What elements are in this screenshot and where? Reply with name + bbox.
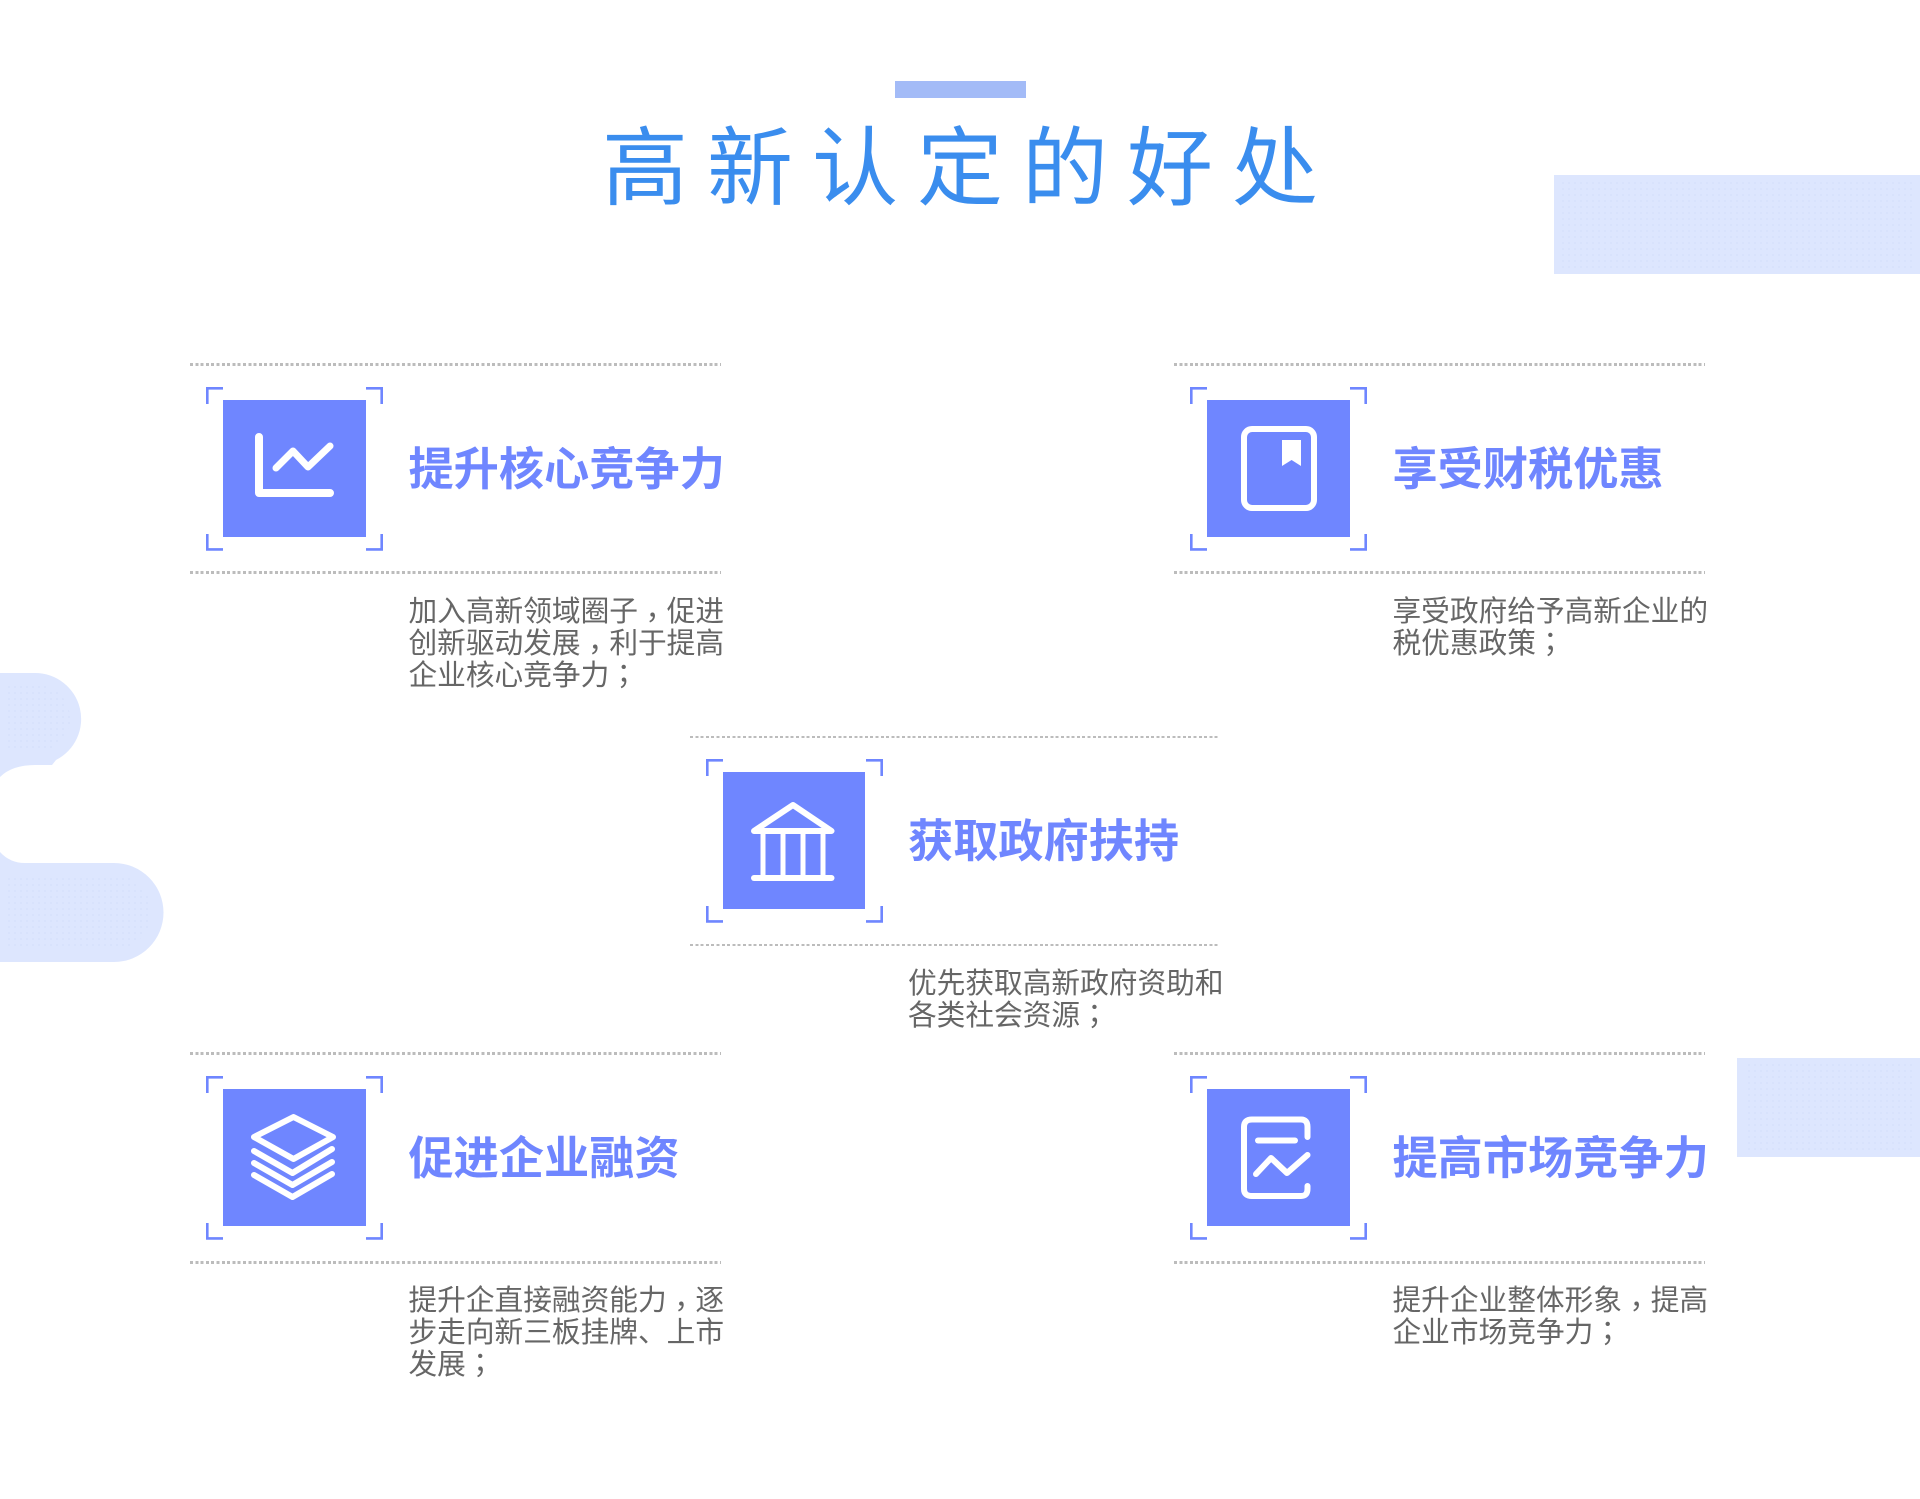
heading: 提升核心竞争力: [408, 444, 725, 494]
description: 享受政府给予高新企业的: [1392, 596, 1708, 628]
heading: 提高市场竞争力: [1392, 1132, 1709, 1184]
title: 高新认定的好处: [602, 121, 1337, 217]
description: 企业核心竞争力；: [408, 660, 638, 692]
description: [1392, 596, 1708, 660]
description: 加入高新领域圈子，促进: [408, 596, 724, 635]
icon: line chart: [223, 400, 366, 537]
icon frame corners: [1190, 387, 1367, 551]
icon frame corners: [706, 759, 883, 923]
panel: 提升核心竞争力: [190, 363, 725, 692]
icon frame corners: [206, 1076, 383, 1240]
description: 发展；: [408, 1349, 495, 1381]
panel: 促进企业融资: [190, 1052, 724, 1381]
icon: report with trend line: [1207, 1089, 1350, 1226]
description: 各类社会资源；: [908, 1000, 1109, 1032]
icon frame corners: [1190, 1076, 1367, 1240]
description: 企业市场竞争力；: [1392, 1317, 1622, 1349]
panel: 获取政府扶持: [690, 736, 1224, 1032]
description: 提升企直接融资能力，逐: [408, 1285, 724, 1324]
description: [408, 596, 724, 692]
icon: government building: [723, 772, 865, 909]
panel: 享受财税优惠: [1174, 363, 1708, 660]
heading: 获取政府扶持: [908, 816, 1179, 866]
icon frame corners: [206, 387, 383, 551]
description: 优先获取高新政府资助和: [908, 968, 1224, 1000]
description: 创新驱动发展，利于提高: [408, 628, 724, 667]
description: [408, 1285, 724, 1381]
heading: 促进企业融资: [408, 1132, 680, 1184]
title accent bar: [895, 81, 1026, 98]
description: 步走向新三板挂牌、上市: [408, 1317, 724, 1349]
description: 提升企业整体形象，提高: [1392, 1285, 1708, 1324]
panel: 提高市场竞争力: [1174, 1052, 1709, 1349]
icon: bookmarked book: [1207, 400, 1350, 537]
description: 税优惠政策；: [1392, 628, 1565, 660]
description: [1392, 1285, 1708, 1349]
icon: stacked layers: [223, 1089, 366, 1226]
description: [908, 968, 1224, 1032]
heading: 享受财税优惠: [1392, 444, 1664, 494]
